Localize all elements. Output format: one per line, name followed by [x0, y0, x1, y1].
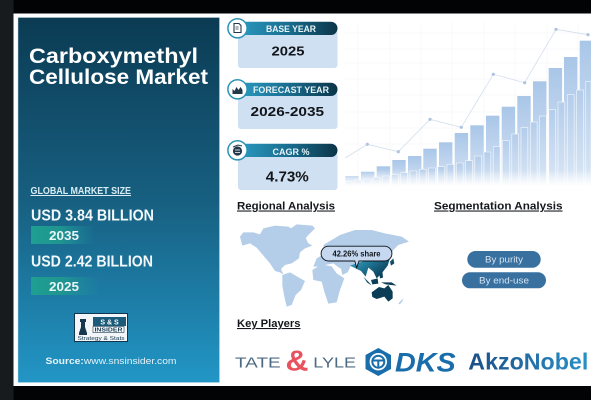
pill: by end-use: [462, 272, 546, 288]
card: base year: [228, 19, 338, 68]
panel: market summary: [18, 18, 220, 382]
value: 2035 market size: USD 3.84 BILLION: [31, 208, 154, 224]
title: [29, 45, 208, 89]
logo: S&S Insider: Strategy & Stats: [78, 336, 125, 342]
logo: Tate & Lyle: TATE: [235, 354, 281, 371]
logo: S&S Insider: INSIDER: [94, 328, 123, 334]
card: forecast year: 2026-2035: [251, 104, 324, 119]
year tag: 2035: 2035: [49, 229, 79, 243]
heading: segmentation analysis: Segmentation Analysis: [434, 200, 563, 212]
logo: DKS: DKS: [395, 348, 456, 378]
chart: growth bars and trend line: [344, 20, 600, 190]
card: CAGR: [228, 141, 338, 190]
card: forecast year: [228, 80, 338, 129]
heading: global market size: GLOBAL MARKET SIZE: [30, 186, 131, 197]
pill: by end-use: By end-use: [479, 276, 529, 286]
icon: growth globe: [228, 141, 247, 160]
heading: regional analysis: Regional Analysis: [237, 200, 335, 212]
logo: Tate & Lyle: &: [286, 346, 309, 378]
heading: key players: Key Players: [237, 318, 301, 330]
logo: S&S Insider: S & S: [100, 320, 119, 326]
year tag: 2025: [31, 277, 101, 295]
year tag: 2025: 2025: [49, 280, 79, 294]
icon: report: [228, 19, 247, 38]
pill: by purity: [467, 251, 541, 268]
logo: Tate & Lyle: [235, 346, 356, 378]
continents in light blue: [240, 224, 409, 307]
icon: factory chart: [228, 80, 247, 99]
card: base year: BASE YEAR: [266, 24, 316, 35]
year tag: 2035: [31, 226, 95, 244]
logo: AkzoNobel: AkzoNobel: [468, 348, 588, 374]
logo: S&S Insider: [74, 314, 128, 342]
Asia-Pacific highlighted region: [350, 258, 397, 302]
source: Source: www.snsinsider.com: [46, 356, 177, 367]
card: CAGR: 4.73%: [266, 169, 309, 186]
card: base year: 2025: [272, 44, 304, 59]
card: CAGR: CAGR %: [272, 147, 310, 158]
logo: DKS: [366, 348, 456, 378]
value: 2025 market size: USD 2.42 BILLION: [31, 254, 153, 270]
pill: by purity: By purity: [485, 254, 523, 266]
callout: 42.26% share: 42.26% share: [332, 250, 381, 258]
title: Carboxymethyl: [29, 45, 198, 68]
card: forecast year: FORECAST YEAR: [253, 85, 329, 96]
title: Cellulose Market: [29, 66, 208, 89]
world map: [240, 224, 409, 307]
callout: 42.26% share: [321, 246, 392, 268]
logo: Tate & Lyle: LYLE: [313, 354, 356, 371]
